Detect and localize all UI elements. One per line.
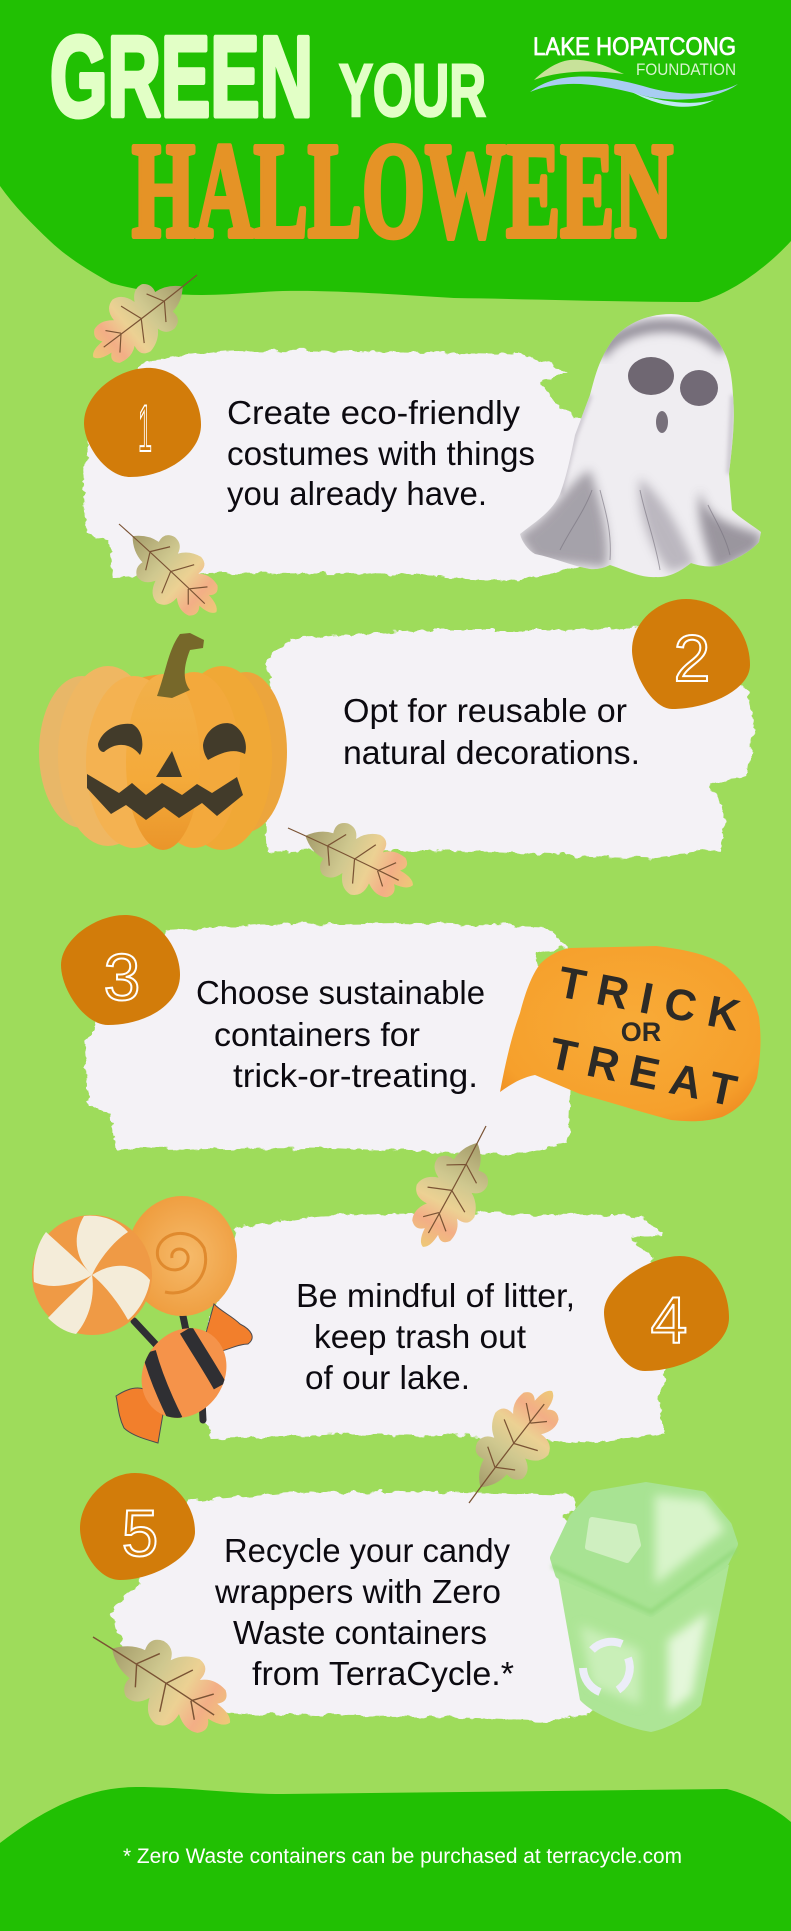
- pumpkin stem: [157, 633, 204, 698]
- number 2: 2: [674, 621, 710, 695]
- logo: lake hopatcong foundation: FOUNDATION: [636, 60, 736, 79]
- leaf: top: [73, 249, 216, 382]
- header green shape: [0, 0, 791, 302]
- panel: step 2: [265, 599, 754, 858]
- number blob 2: [632, 599, 750, 709]
- pumpkin lobes: [39, 666, 287, 850]
- icon: trick or treat speech bubble: TRICK: [554, 958, 744, 1041]
- recycling arrows: [583, 1642, 630, 1692]
- title: green: GREEN: [50, 14, 313, 141]
- step 5 text: [214, 1532, 514, 1692]
- step 2 text: Opt for reusable or: [343, 692, 627, 729]
- panel: step 1: [83, 305, 770, 585]
- footer note: * Zero Waste containers can be purchased at terracycle.com: [123, 1845, 682, 1868]
- wrapped candy: [116, 1304, 252, 1443]
- icon: trick or treat speech bubble: TREAT: [545, 1029, 741, 1116]
- leaf: step 3: [393, 1110, 514, 1262]
- bin body: [556, 1565, 729, 1732]
- swirl lollipop: [32, 1215, 152, 1335]
- step 1 text: Create eco-friendly: [227, 394, 521, 431]
- step 1 text: you already have.: [227, 475, 487, 512]
- panel: step 1: 1: [138, 391, 152, 465]
- orange lollipop: [127, 1196, 237, 1316]
- icon: candy: [32, 1196, 252, 1443]
- number 5: 5: [122, 1496, 158, 1570]
- panel: step 4: [200, 1110, 729, 1443]
- logo: lake hopatcong foundation: LAKE HOPATCONG: [533, 33, 736, 61]
- leaf: step 5: [71, 1606, 250, 1757]
- number blob 3: [61, 915, 180, 1025]
- number blob 4: [604, 1256, 729, 1371]
- step 5 text: Recycle your candy: [224, 1532, 510, 1569]
- panel: step 5: [80, 1473, 736, 1732]
- brush card 5: [110, 1491, 600, 1721]
- number 3: 3: [104, 940, 140, 1014]
- number 4: 4: [651, 1283, 687, 1357]
- step 5 text: wrappers with Zero: [214, 1573, 501, 1610]
- step 3 text: Choose sustainable: [196, 974, 485, 1011]
- icon: trick or treat speech bubble: [500, 946, 760, 1121]
- leaf: step 1: [97, 502, 237, 636]
- number blob 1: [84, 368, 201, 477]
- footer green shape: [0, 1787, 791, 1931]
- leaf: step 4: [443, 1372, 580, 1524]
- step 1 text: costumes with things: [227, 435, 535, 472]
- step 5 text: Waste containers: [233, 1614, 487, 1651]
- icon: trick or treat speech bubble: OR: [621, 1017, 661, 1047]
- step 2 text: natural decorations.: [343, 734, 640, 771]
- step 4 text: [296, 1277, 575, 1396]
- bin lid: [555, 1487, 733, 1612]
- icon: ghost: [520, 314, 761, 578]
- brush card 3: [85, 923, 570, 1155]
- brush card 4: [200, 1213, 666, 1443]
- step 4 text: Be mindful of litter,: [296, 1277, 575, 1314]
- step 4 text: keep trash out: [314, 1318, 526, 1355]
- icon: green recycling bin: [552, 1487, 736, 1732]
- step 2 text: [343, 692, 640, 771]
- candy sticks: [134, 1316, 203, 1420]
- step 3 text: trick-or-treating.: [233, 1057, 478, 1094]
- leaf: step 2: [274, 799, 426, 916]
- title: your: YOUR: [339, 49, 486, 132]
- step 1 text: [227, 394, 535, 512]
- step 3 text: [196, 974, 485, 1094]
- title: [50, 14, 673, 266]
- logo: lake hopatcong foundation: [530, 33, 738, 107]
- panel: step 3: [61, 915, 760, 1155]
- step 5 text: from TerraCycle.*: [252, 1655, 514, 1692]
- brush card 2: [265, 627, 754, 858]
- icon: jack-o-lantern pumpkin: [39, 633, 287, 850]
- step 4 text: of our lake.: [305, 1359, 470, 1396]
- number blob 5: [80, 1473, 195, 1580]
- pumpkin face: [87, 723, 246, 820]
- brush card 1: [83, 350, 600, 581]
- step 3 text: containers for: [214, 1016, 420, 1053]
